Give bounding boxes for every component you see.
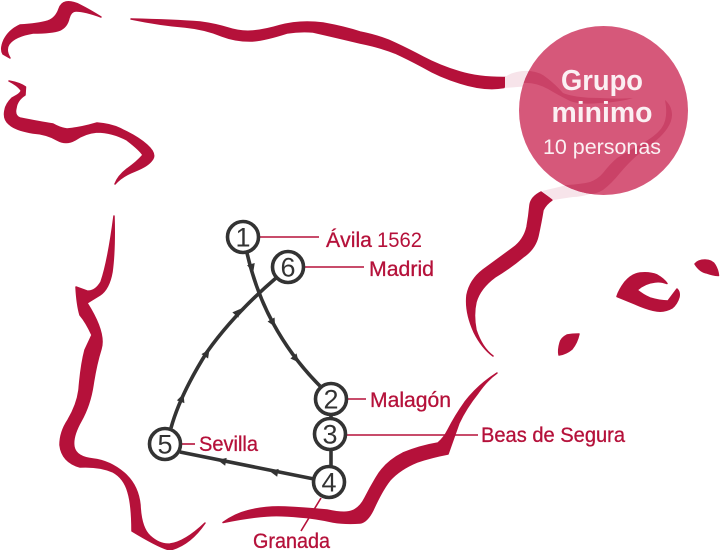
number 6: 6 [280, 252, 296, 282]
route: 3 to 4 [329, 449, 333, 467]
arrow [269, 467, 279, 477]
badge subtext: 10 personas [543, 136, 661, 159]
route: 1 to 2 [247, 253, 320, 386]
stop 3 [314, 418, 346, 450]
island: Menorca [695, 260, 718, 276]
arrow [217, 456, 227, 466]
number 1: 1 [235, 222, 251, 252]
stop 5 [150, 428, 180, 460]
leader: Ávila [259, 236, 319, 238]
leader: Sevilla [182, 443, 195, 445]
coast overlay: catalonia [564, 100, 672, 194]
number 5: 5 [157, 430, 173, 460]
badge heading: Grupo [561, 65, 643, 97]
number 3: 3 [322, 420, 338, 450]
route: 5 to 6 [171, 278, 276, 428]
label: Ávila: Ávila [326, 229, 372, 252]
label: Malagón: Malagón [370, 389, 451, 412]
badge heading line 2: minimo [552, 97, 652, 129]
faded coast under badge [505, 71, 590, 200]
place labels [199, 229, 625, 550]
faded coast: northeast [505, 71, 530, 88]
coast: west and southwest [60, 216, 205, 550]
leader: Madrid [304, 266, 364, 268]
stop 4 [314, 466, 344, 498]
stop 6 [272, 252, 304, 282]
label: Beas de Segura: Beas de Segura [481, 424, 625, 447]
badge circle [519, 26, 688, 195]
number 4: 4 [321, 468, 337, 498]
arrow [247, 263, 257, 273]
island: Ibiza [559, 334, 579, 355]
leader: Malagón [347, 398, 366, 400]
coast overlay: northeast [524, 71, 632, 104]
coast seen through badge [524, 71, 672, 194]
coast: north [131, 19, 507, 89]
island: Mallorca [617, 273, 679, 311]
number 2: 2 [323, 384, 339, 414]
arrow [268, 318, 279, 329]
coast: east [467, 192, 552, 356]
arrow [232, 306, 244, 318]
arrow [177, 392, 187, 403]
label: Sevilla: Sevilla [199, 433, 258, 456]
route arrowheads [177, 263, 302, 477]
coast: south and southeast [223, 373, 497, 523]
label: 1562: 1562 [377, 229, 422, 252]
stop 1 [228, 222, 258, 252]
badge: minimum group [519, 26, 688, 195]
stop 2 [316, 384, 346, 414]
coast: northwest cape [2, 2, 101, 58]
route lines [171, 253, 331, 479]
stop numbers [157, 222, 339, 498]
stops [150, 222, 346, 498]
leader: Beas de Segura [346, 434, 478, 436]
route: 4 to 5 [180, 452, 314, 479]
arrow [290, 353, 302, 365]
leader: Granada [301, 498, 321, 531]
faded coast: catalonia [542, 182, 590, 200]
arrow [201, 347, 213, 359]
coast: galicia [4, 81, 154, 184]
route: 2 to 3 [329, 414, 333, 420]
label: Madrid: Madrid [369, 258, 434, 281]
leader lines [182, 237, 478, 531]
